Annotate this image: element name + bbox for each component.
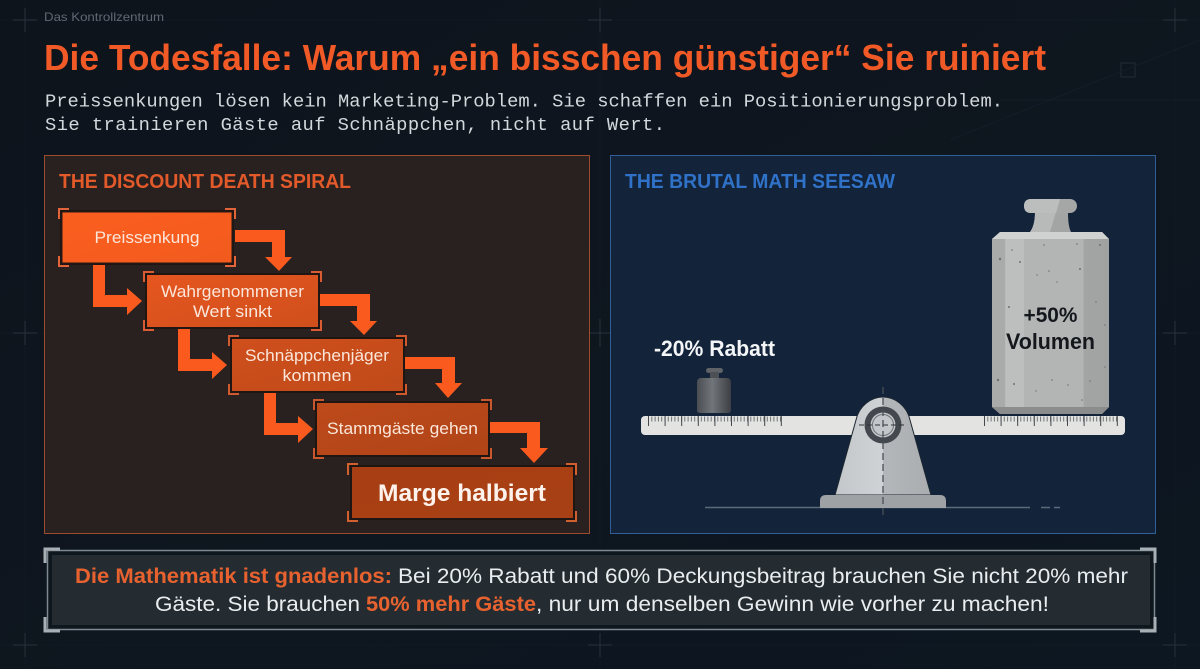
panel: brutal math seesaw [610, 156, 1156, 534]
step: Preissenkung [59, 209, 235, 266]
fulcrum [820, 387, 946, 519]
callout text: , nur um denselben Gewinn wie vorher zu machen! [536, 593, 1049, 616]
panel heading: seesaw: THE BRUTAL MATH SEESAW [625, 171, 895, 193]
callout text: Die Mathematik ist gnadenlos: [75, 565, 392, 588]
step: Wahrgenommener Wert sinkt: Wahrgenommener [161, 283, 305, 301]
label: -20% Rabatt: -20% Rabatt [654, 336, 776, 361]
panel: discount death spiral [44, 156, 590, 534]
arrows: down-right connectors [93, 265, 313, 443]
label: +50% Volumen: +50% [1024, 304, 1078, 327]
step: Schnäppchenjäger kommen [229, 336, 406, 394]
callout [45, 549, 1155, 631]
step: Stammgäste gehen: Stammgäste gehen [327, 420, 478, 438]
step: Wahrgenommener Wert sinkt: Wert sinkt [193, 303, 272, 321]
step: Marge halbiert [348, 464, 576, 521]
title: Die Todesfalle: Warum „ein bisschen günstiger“ Sie ruiniert [44, 37, 1046, 78]
callout text: 50% mehr Gäste [366, 593, 536, 616]
big weight [992, 199, 1109, 414]
subtitle [45, 90, 1003, 136]
callout text: Bei 20% Rabatt und 60% Deckungsbeitrag brauchen Sie nicht 20% mehr [398, 565, 1128, 588]
step: Wahrgenommener Wert sinkt [144, 272, 321, 330]
ground line [705, 506, 1060, 508]
subtitle: Sie trainieren Gäste auf Schnäppchen, nicht auf Wert. [45, 114, 665, 136]
small weight [697, 368, 731, 413]
step: Schnäppchenjäger kommen: kommen [282, 367, 352, 385]
step: Stammgäste gehen [314, 400, 491, 458]
panel heading: spiral: THE DISCOUNT DEATH SPIRAL [59, 171, 351, 193]
step: Marge halbiert: Marge halbiert [378, 480, 546, 507]
subtitle: Preissenkungen lösen kein Marketing-Problem. Sie schaffen ein Positionierungsproblem. [45, 90, 1003, 112]
section label: Das Kontrollzentrum [44, 10, 164, 24]
step: Schnäppchenjäger kommen: Schnäppchenjäger [245, 347, 390, 365]
arrows: right-down connectors [235, 230, 548, 463]
callout text: Gäste. Sie brauchen [155, 593, 360, 616]
step: Preissenkung: Preissenkung [94, 228, 200, 247]
big weight: Volumen [1006, 329, 1095, 354]
callout text [75, 565, 1128, 616]
seesaw beam [641, 416, 1125, 435]
